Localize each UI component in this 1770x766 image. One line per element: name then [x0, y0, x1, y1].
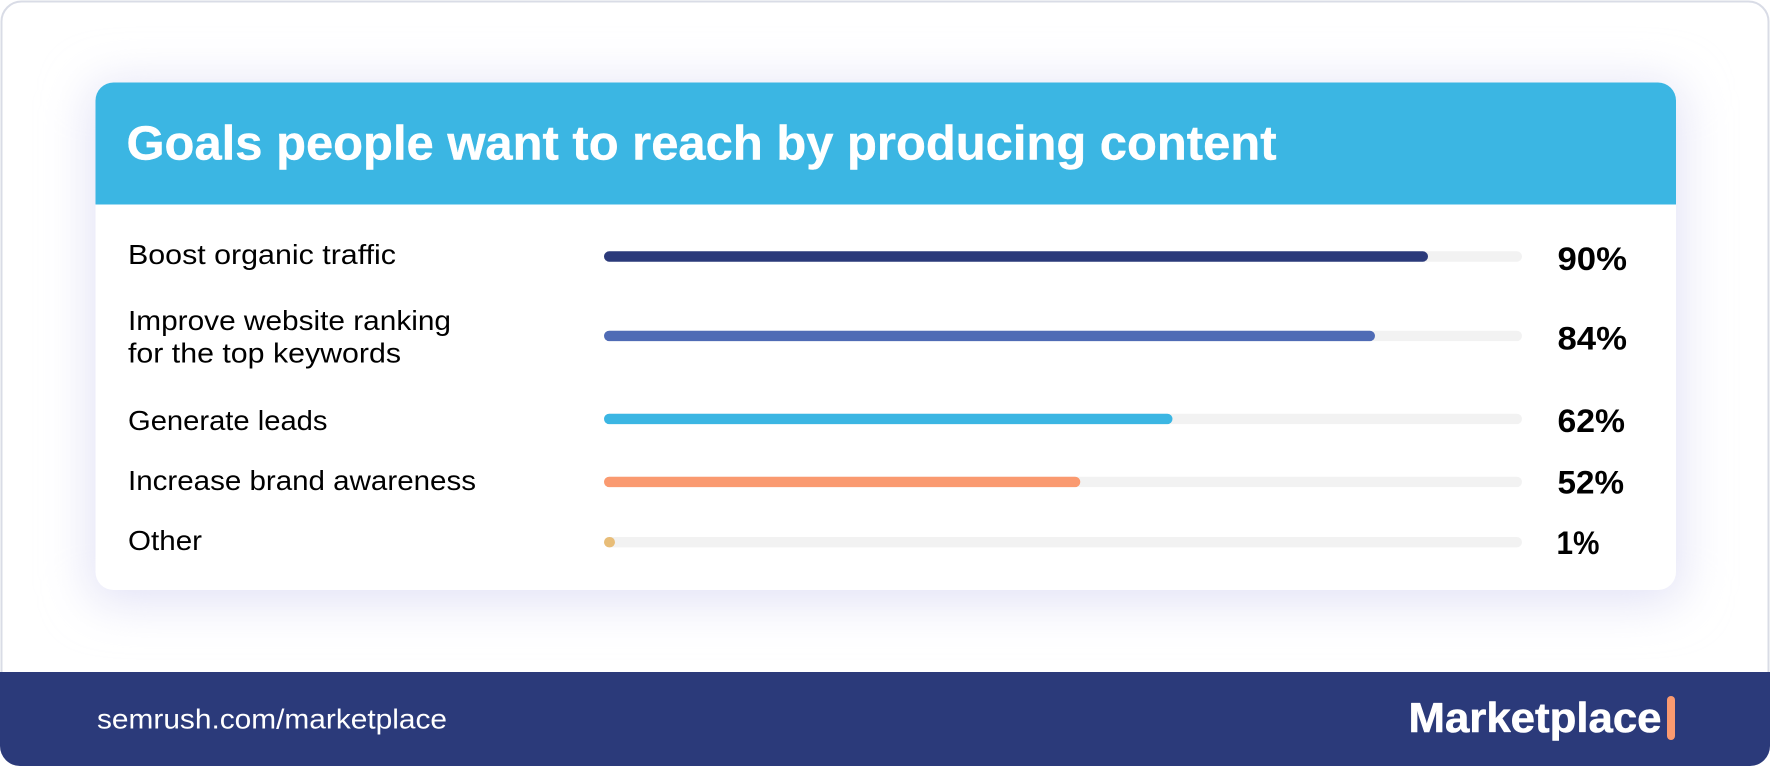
row: other: 1% — [1556, 525, 1600, 561]
row: generate leads — [128, 403, 1625, 439]
row: improve website ranking: for the top keywords — [128, 338, 401, 369]
row: improve website ranking — [128, 305, 1627, 369]
row: generate leads: 62% — [1558, 403, 1625, 439]
title: Goals people want to reach by producing content — [126, 118, 1277, 170]
row: increase brand awareness — [128, 464, 1624, 500]
card header band — [96, 82, 1676, 204]
row: increase brand awareness: Increase brand awareness — [128, 465, 476, 496]
row: improve website ranking: 84% — [1558, 320, 1627, 356]
card body — [96, 82, 1676, 590]
row: boost organic traffic — [128, 239, 1627, 277]
row: generate leads: Generate leads — [128, 405, 328, 436]
row: boost organic traffic: Boost organic traffic — [128, 239, 396, 270]
panel: goals card — [96, 82, 1676, 590]
row: other — [128, 525, 1600, 561]
bar chart — [128, 239, 1627, 561]
row: boost organic traffic: 90% — [1558, 241, 1627, 277]
row: increase brand awareness: 52% — [1558, 464, 1624, 500]
footer url: semrush.com/marketplace — [97, 703, 447, 734]
row: other: Other — [128, 525, 202, 556]
row: improve website ranking: Improve website ranking — [128, 305, 451, 336]
card shadow — [90, 84, 1682, 602]
footer band — [0, 672, 1770, 766]
logo: Marketplace: Marketplace — [1408, 694, 1662, 741]
